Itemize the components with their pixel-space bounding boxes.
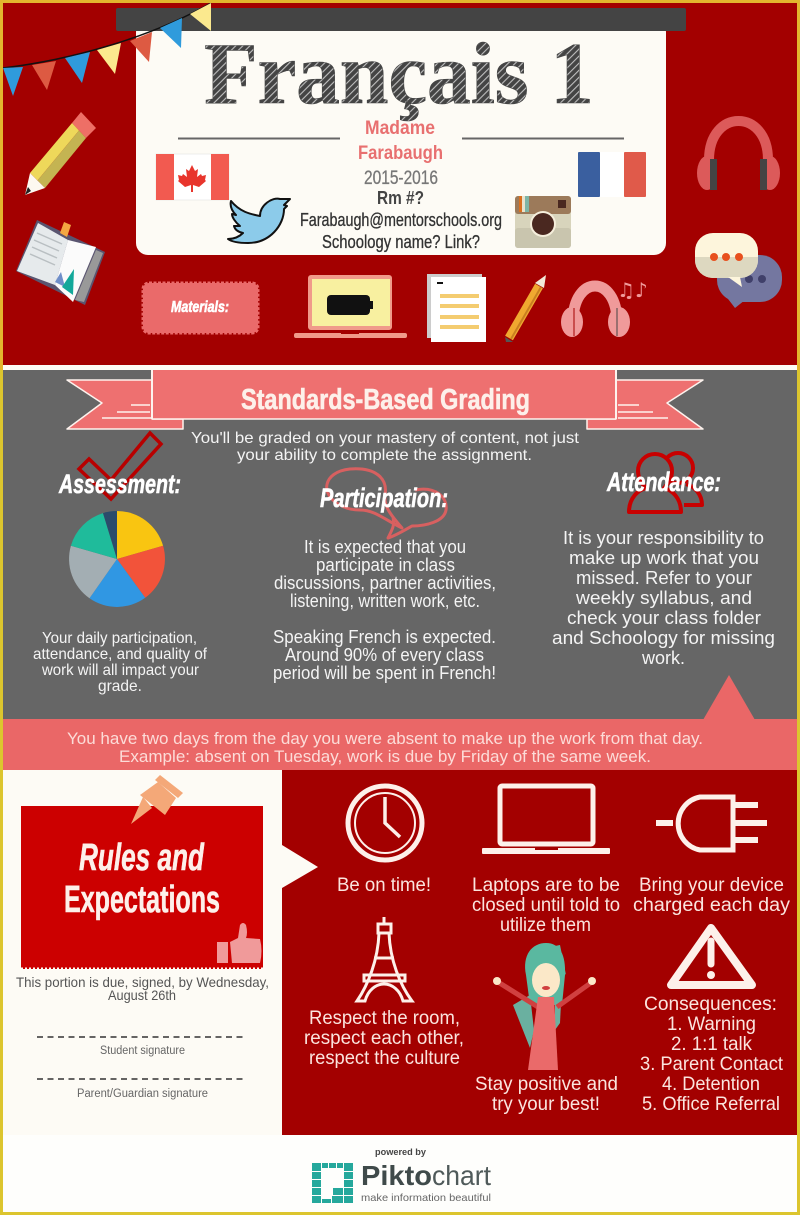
participation text: It is expected that you xyxy=(304,537,466,557)
rules heading: Rules and xyxy=(79,837,205,879)
ribbon banner xyxy=(67,370,703,429)
rule: warning consequences: 2. 1:1 talk xyxy=(671,1034,752,1055)
signature lines: Student signature xyxy=(100,1045,185,1057)
icon: pink headphones with notes xyxy=(561,278,648,337)
rule: warning consequences: Consequences: xyxy=(644,994,777,1015)
teacher contact text: Farabaugh@mentorschools.org xyxy=(300,210,502,230)
signature lines xyxy=(37,1037,243,1100)
rule: warning consequences: 3. Parent Contact xyxy=(640,1054,784,1075)
rule: warning consequences: 1. Warning xyxy=(667,1014,756,1035)
teacher contact text: Rm #? xyxy=(377,188,424,208)
teacher contact text: Farabaugh xyxy=(358,143,443,164)
whiteboard divider lines xyxy=(178,138,624,140)
signature due note xyxy=(16,974,269,1003)
rules card xyxy=(21,806,263,969)
logo: Piktochart wordmark: Pikto xyxy=(361,1160,432,1191)
logo: Piktochart wordmark xyxy=(361,1160,491,1204)
rule: laptop: utilize them xyxy=(500,915,591,936)
icon: speech bubble outlines xyxy=(327,469,446,538)
rule: clock: Be on time! xyxy=(337,875,431,896)
logo: Piktochart wordmark: chart xyxy=(432,1160,491,1191)
banner heading: Standards-Based Grading xyxy=(241,384,530,416)
section background: header xyxy=(3,3,797,365)
rule: laptop xyxy=(472,786,620,936)
icon: chat bubbles xyxy=(695,233,782,308)
icon: people outlines xyxy=(629,453,702,512)
attendance text xyxy=(552,528,775,668)
section background: rules panel xyxy=(282,770,797,1135)
rule: cheering girl xyxy=(475,943,618,1115)
assessment text xyxy=(33,630,208,695)
icon: laptop with battery xyxy=(294,275,407,338)
title: Français 1 xyxy=(204,26,594,123)
teacher contact text: Madame xyxy=(365,118,435,139)
participation text: Around 90% of every class xyxy=(285,645,484,665)
teacher contact text: Schoology name? Link? xyxy=(322,232,480,252)
icon: French flag xyxy=(578,152,646,197)
attendance text: missed. Refer to your xyxy=(576,568,752,588)
attendance text: and Schoology for missing xyxy=(552,628,775,648)
logo: Piktochart wordmark: make information beautiful xyxy=(361,1192,491,1204)
participation text: participate in class xyxy=(316,555,455,575)
heading: Participation: Participation: xyxy=(320,483,448,513)
participation text: Speaking French is expected. xyxy=(273,627,496,647)
signature due note: August 26th xyxy=(108,987,176,1003)
icon: Instagram camera xyxy=(515,196,571,248)
icon: Canadian flag xyxy=(156,154,229,200)
pink band with make-up policy: Example: absent on Tuesday, work is due by Friday of the same week. xyxy=(119,747,651,766)
materials badge: Materials: xyxy=(171,299,229,316)
pink band with make-up policy: You have two days from the day you were absent to make up the work from that day. xyxy=(67,729,703,748)
section background: grading xyxy=(3,370,797,719)
assessment text: grade. xyxy=(98,678,142,695)
icon: yellow pencil xyxy=(25,112,96,195)
attendance text: weekly syllabus, and xyxy=(575,588,752,608)
rule: cheering girl: Stay positive and xyxy=(475,1074,618,1095)
icon: paper document xyxy=(427,274,486,342)
assessment text: work will all impact your xyxy=(41,662,200,679)
icon: Twitter bird xyxy=(228,199,290,243)
icon: open book xyxy=(16,220,105,305)
whiteboard top bar xyxy=(116,8,686,31)
grading intro text: your ability to complete the assignment. xyxy=(237,447,532,464)
signature due note: This portion is due, signed, by Wednesday, xyxy=(16,974,269,990)
materials badge xyxy=(143,283,258,333)
heading: Assessment: Assessment: xyxy=(58,469,181,499)
grading intro text xyxy=(191,430,580,464)
attendance text: make up work that you xyxy=(569,548,759,568)
icon: red headphones xyxy=(697,121,780,190)
bunting flags xyxy=(3,3,211,96)
rule: laptop: closed until told to xyxy=(472,895,620,916)
whiteboard panel xyxy=(116,8,686,255)
grading intro text: You'll be graded on your mastery of content, not just xyxy=(191,430,580,447)
heading: Attendance: Attendance: xyxy=(606,467,721,497)
rule: warning consequences: 5. Office Referral xyxy=(642,1094,780,1115)
icon: thumbs up xyxy=(217,923,262,963)
logo: Piktochart mark xyxy=(312,1163,353,1203)
footer background xyxy=(3,1135,797,1212)
rule: laptop: Laptops are to be xyxy=(472,875,620,896)
teacher contact text xyxy=(300,118,502,252)
rule: Eiffel tower: respect the culture xyxy=(309,1048,460,1069)
attendance text: work. xyxy=(641,648,685,668)
rule: cheering girl: try your best! xyxy=(492,1094,600,1115)
attendance text: It is your responsibility to xyxy=(563,528,764,548)
icon: push pin xyxy=(131,775,183,824)
signature lines: Parent/Guardian signature xyxy=(77,1088,208,1100)
participation text xyxy=(273,537,496,683)
rule: clock xyxy=(337,786,431,896)
footer: powered by: powered by xyxy=(375,1147,426,1157)
participation text: period will be spent in French! xyxy=(273,663,496,683)
rules card: Expectations xyxy=(64,879,220,921)
rule: Eiffel tower: respect each other, xyxy=(304,1028,464,1049)
attendance text: check your class folder xyxy=(567,608,761,628)
rule: Eiffel tower xyxy=(304,917,464,1069)
rule: Eiffel tower: Respect the room, xyxy=(309,1008,460,1029)
pink band with make-up policy xyxy=(3,675,797,770)
icon: pink headphones with notes: ♫♪ xyxy=(617,278,648,302)
teacher contact text: 2015-2016 xyxy=(364,168,438,189)
rule: plug xyxy=(633,797,791,916)
rule: warning consequences xyxy=(640,928,784,1115)
participation text: discussions, partner activities, xyxy=(274,573,496,593)
rule: warning consequences: 4. Detention xyxy=(662,1074,760,1095)
arrow: rules pointer xyxy=(282,845,318,888)
rule: plug: charged each day xyxy=(633,895,791,916)
icon: orange pencil xyxy=(505,275,546,342)
icon: checkmark outline xyxy=(79,433,161,499)
pie chart xyxy=(69,511,165,607)
participation text: listening, written work, etc. xyxy=(290,591,480,611)
rule: plug: Bring your device xyxy=(639,875,784,896)
assessment text: Your daily participation, xyxy=(42,630,197,647)
assessment text: attendance, and quality of xyxy=(33,646,208,663)
